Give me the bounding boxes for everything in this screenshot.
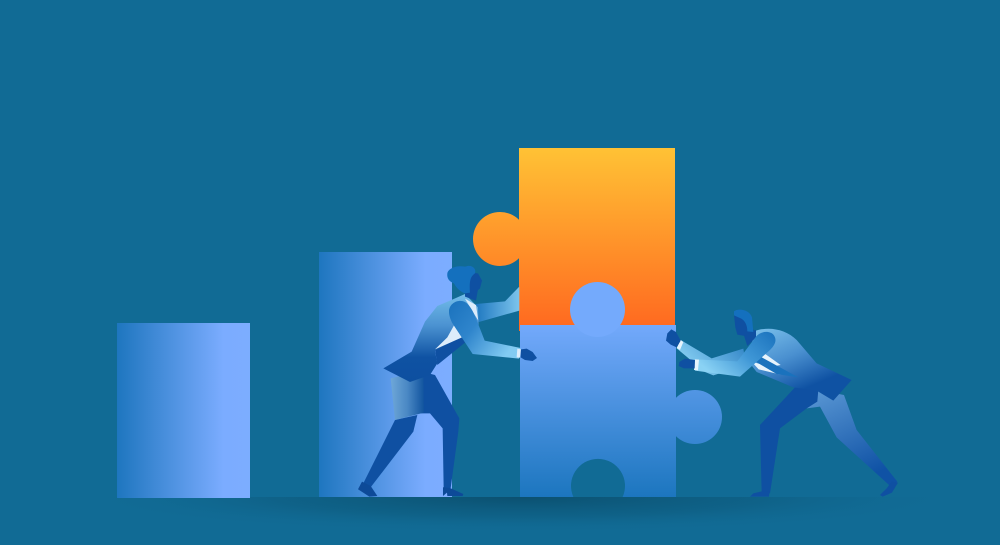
white collar panel bbox=[435, 325, 462, 349]
upper cuff bbox=[677, 340, 683, 350]
blue puzzle piece bbox=[520, 282, 722, 497]
orange tab bbox=[473, 212, 527, 266]
white shirt bbox=[465, 299, 478, 321]
upper hand bbox=[666, 329, 681, 347]
back arm bbox=[677, 340, 746, 375]
hand bbox=[521, 349, 537, 361]
orange left strip bbox=[519, 215, 527, 331]
blue piece body bbox=[520, 325, 676, 497]
front arm bbox=[449, 301, 521, 359]
orange piece body bbox=[519, 148, 675, 326]
white collar panel bbox=[761, 353, 781, 367]
short bar bbox=[117, 323, 250, 498]
lower hand bbox=[679, 359, 695, 368]
hair bbox=[447, 266, 475, 293]
figure: man pushing bbox=[666, 310, 898, 497]
waist band bbox=[435, 337, 465, 365]
figure: woman pushing bbox=[358, 266, 537, 497]
back shoe bbox=[880, 482, 898, 497]
white shirt bbox=[752, 362, 781, 375]
front arm bbox=[695, 332, 775, 377]
lower cuff bbox=[694, 359, 699, 370]
front leg bbox=[760, 387, 818, 493]
orange puzzle piece bbox=[473, 148, 675, 331]
hair bbox=[734, 310, 753, 332]
tie bbox=[754, 356, 798, 377]
back leg bbox=[363, 415, 417, 487]
jacket bbox=[750, 329, 852, 401]
face bbox=[466, 273, 482, 293]
front shoe bbox=[443, 487, 463, 496]
face bbox=[734, 315, 754, 336]
back shoe bbox=[358, 482, 377, 497]
back arm bbox=[476, 287, 519, 323]
right tab bbox=[668, 390, 722, 444]
front shoe bbox=[750, 491, 769, 497]
front leg bbox=[418, 372, 459, 488]
cuff bbox=[517, 349, 521, 358]
top tab bbox=[570, 282, 625, 337]
neck bbox=[743, 330, 756, 346]
jacket bbox=[383, 294, 479, 382]
neck bbox=[465, 285, 478, 301]
tall bar bbox=[319, 252, 452, 497]
floor shadow bbox=[60, 497, 960, 537]
skirt bbox=[391, 370, 424, 420]
back leg bbox=[807, 388, 897, 487]
bottom notch bbox=[571, 459, 625, 497]
